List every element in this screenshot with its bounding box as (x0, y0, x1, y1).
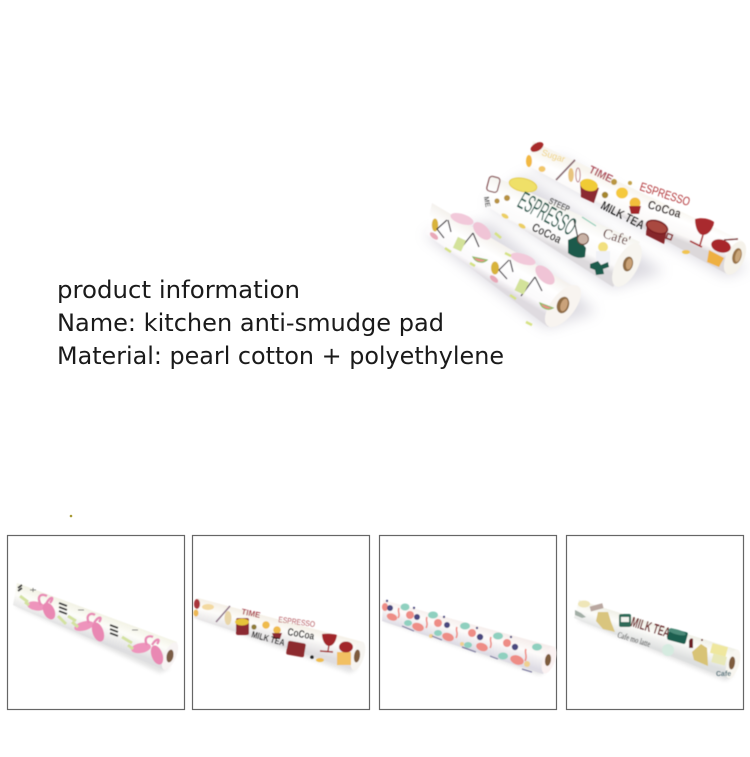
thumbnail 3: pink flamingo and leaf roll (380, 536, 559, 710)
thumbnail 4: milk tea roll: Cafe mo latte (616, 629, 652, 649)
product information text block: Name: kitchen anti-smudge pad (57, 309, 444, 337)
roll: coffee pattern, back: ESPRESSO (638, 180, 692, 209)
thumbnail 2: coffee roll: MILK TEA (250, 629, 286, 648)
roll: coffee pattern, back (526, 140, 750, 278)
roll: espresso pattern, middle: ESPRESSO (513, 187, 581, 241)
thumbnail 2: coffee roll: ESPRESSO (278, 615, 316, 629)
roll shadows (424, 158, 748, 328)
roll: coffee pattern, back: Sugar (540, 147, 566, 164)
roll: coffee pattern, back: MILK TEA (599, 198, 647, 232)
roll: coffee pattern, back: TIME (587, 164, 614, 186)
thumbnail 2: coffee roll: TIME (241, 607, 262, 620)
thumbnail 2: coffee roll: CoCoa (286, 626, 315, 643)
roll: espresso pattern, middle (482, 175, 648, 291)
roll: espresso pattern, middle: ME (482, 196, 491, 208)
roll: flamingo pattern, front (425, 203, 588, 333)
thumbnail 4: milk tea roll (566, 536, 744, 710)
hero product photo: three rolls (424, 140, 750, 333)
product information text block (57, 276, 504, 370)
thumbnail 1: flamingo roll (8, 536, 184, 710)
small speck (70, 515, 72, 517)
roll: espresso pattern, middle: Cafe' (601, 227, 632, 249)
roll: espresso pattern, middle: STEEP (547, 196, 571, 214)
roll: coffee pattern, back: CoCoa (646, 197, 683, 221)
thumbnail 4: milk tea roll: MILK TEA (629, 614, 672, 641)
thumbnail 2: coffee roll (192, 536, 370, 710)
roll: espresso pattern, middle: CoCoa (530, 220, 564, 246)
thumbnail 4: milk tea roll: Cafe (716, 671, 731, 678)
product information text block: product information (57, 276, 300, 304)
product information text block: Material: pearl cotton + polyethylene (57, 342, 504, 370)
